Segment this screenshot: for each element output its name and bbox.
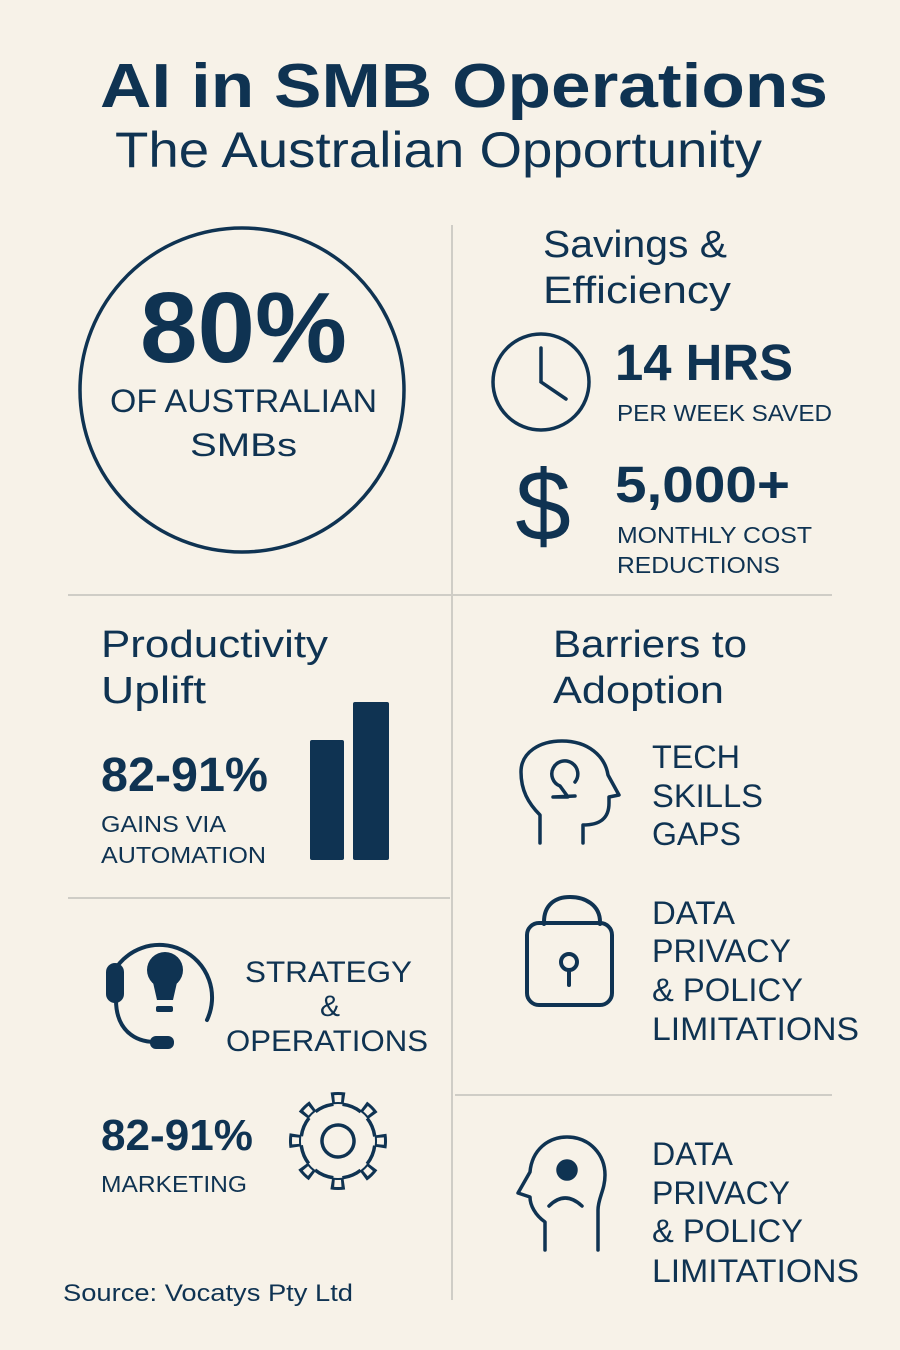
label: &: [320, 990, 340, 1023]
stat: hours: [615, 334, 832, 426]
caption: [110, 383, 377, 463]
panel: barriers: [518, 624, 859, 1289]
stat: hours: 14 HRS: [615, 334, 793, 391]
subtitle: The Australian Opportunity: [115, 122, 762, 178]
heading: Productivity: [101, 624, 328, 666]
label: OPERATIONS: [226, 1025, 428, 1058]
heading: Adoption: [553, 670, 724, 712]
heading: [543, 224, 731, 312]
stat: marketing: [101, 1111, 253, 1197]
icon: dollar: $: [515, 450, 571, 562]
source: Source: Vocatys Pty Ltd: [63, 1280, 353, 1307]
heading: [553, 624, 747, 712]
stat: 82-91%: [101, 749, 268, 802]
stat: cost: 5,000+: [615, 456, 790, 513]
stat: GAINS VIA: [101, 811, 227, 837]
heading: Barriers to: [553, 624, 747, 666]
text: privacy 2: & POLICY: [652, 1213, 803, 1249]
caption: OF AUSTRALIAN: [110, 383, 377, 419]
stat: cost: MONTHLY COST: [617, 522, 812, 548]
text: tech skills: GAPS: [652, 816, 741, 852]
panel: productivity: [101, 624, 389, 868]
stat: marketing: 82-91%: [101, 1111, 253, 1160]
text: tech skills: TECH: [652, 739, 740, 775]
big number: 80%: [140, 272, 347, 384]
panel: strategy: [101, 945, 428, 1197]
icon: clock: [493, 334, 589, 430]
title: AI in SMB Operations: [100, 52, 828, 121]
bar chart: [310, 702, 389, 860]
text: privacy 1: [652, 895, 859, 1047]
panel: savings: [493, 224, 832, 578]
stat: cost: REDUCTIONS: [617, 552, 780, 578]
text: privacy 1: & POLICY: [652, 972, 803, 1008]
stat: hours: PER WEEK SAVED: [617, 400, 832, 426]
stat: cost: [615, 456, 812, 578]
heading: Uplift: [101, 670, 207, 712]
text: privacy 2: PRIVACY: [652, 1175, 790, 1211]
stat: AUTOMATION: [101, 842, 266, 868]
caption: SMBs: [190, 427, 297, 463]
text: privacy 1: PRIVACY: [652, 933, 791, 969]
heading: [101, 624, 328, 712]
text: privacy 1: LIMITATIONS: [652, 1011, 859, 1047]
icon: headset bulb: [106, 945, 212, 1049]
text: privacy 2: [652, 1136, 859, 1289]
text: tech skills: SKILLS: [652, 778, 763, 814]
heading: Savings &: [543, 224, 727, 266]
text: tech skills: [652, 739, 763, 852]
label: [226, 956, 428, 1058]
heading: Efficiency: [543, 270, 731, 312]
stat: marketing: MARKETING: [101, 1171, 247, 1197]
icon: head with bulb: [521, 741, 619, 843]
icon: sad head: [518, 1137, 605, 1250]
panel: 80% stat: [80, 228, 404, 552]
text: privacy 2: LIMITATIONS: [652, 1253, 859, 1289]
icon: gear: [289, 1092, 387, 1190]
text: privacy 1: DATA: [652, 895, 736, 931]
label: STRATEGY: [245, 956, 412, 989]
icon: lock: [527, 897, 612, 1005]
text: privacy 2: DATA: [652, 1136, 734, 1172]
stat: [101, 749, 268, 868]
circle: [80, 228, 404, 552]
